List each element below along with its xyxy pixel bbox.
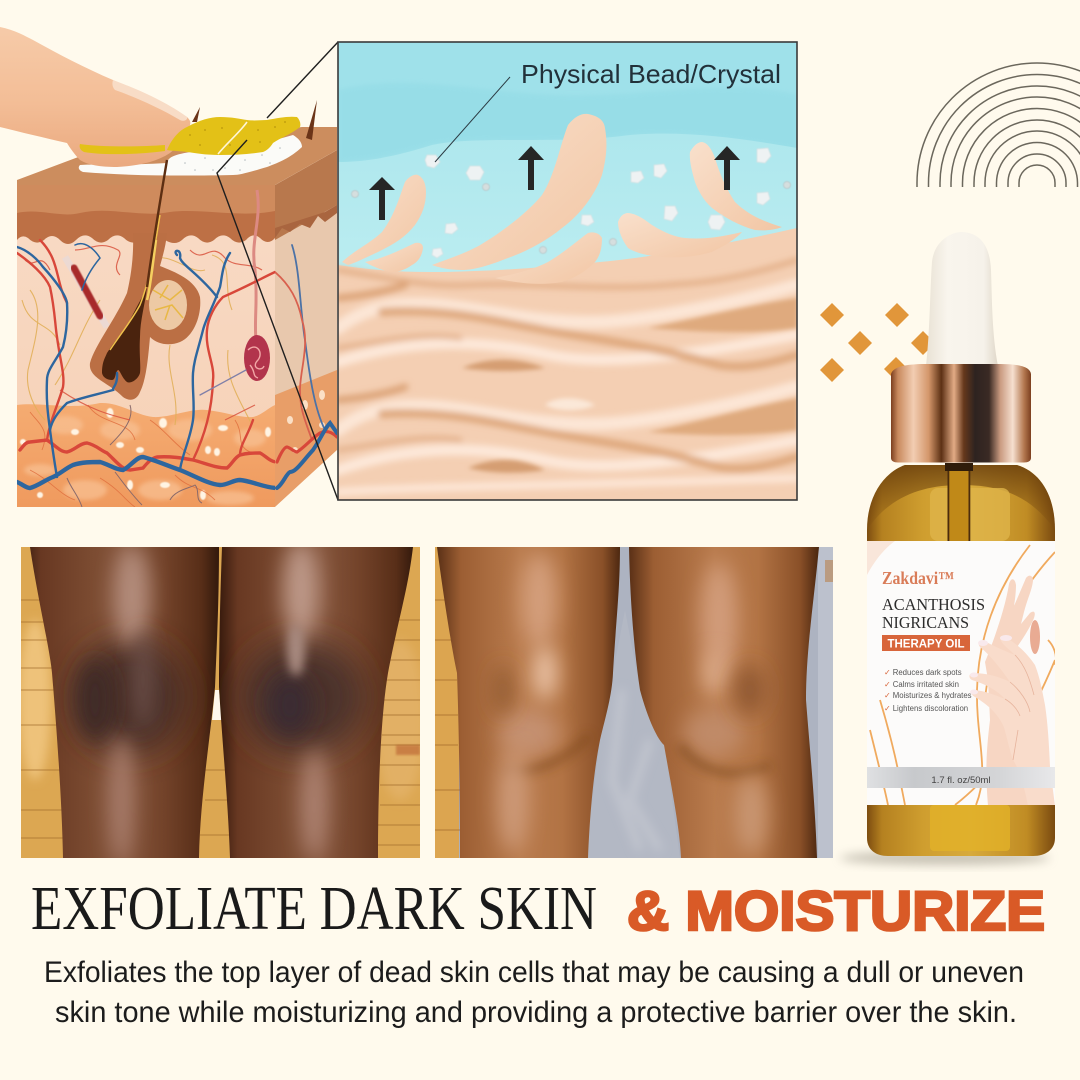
bottle shadow <box>840 851 1050 865</box>
cube right side face <box>275 150 337 510</box>
dropper bulb <box>926 232 998 366</box>
arrow: lift right <box>714 146 740 190</box>
brand name: Zakdavi™ <box>882 568 954 588</box>
fibres lifting from the surface <box>342 114 782 284</box>
right leg <box>218 540 416 860</box>
thin capillaries <box>22 255 252 425</box>
body text: Exfoliates the top layer of dead skin cells that may be causing a dull or uneven <box>44 956 1024 989</box>
label swooshes <box>870 545 1056 805</box>
volume band: 1.7 fl. oz/50ml <box>931 775 991 786</box>
zoom callout lines <box>217 42 338 500</box>
finger <box>0 27 190 167</box>
right leg <box>629 547 819 858</box>
product name <box>882 595 985 632</box>
product label <box>867 541 1056 806</box>
body text: skin tone while moisturizing and providing a protective barrier over the skin. <box>55 996 1017 1029</box>
left leg <box>21 545 221 865</box>
panel: magnified exfoliation <box>338 42 798 500</box>
exfoliated beads <box>352 148 790 258</box>
benefit list <box>884 668 972 713</box>
left leg <box>437 547 621 858</box>
photo: before, dark knees <box>19 540 425 865</box>
sweat gland <box>244 190 270 381</box>
hands illustration <box>969 576 1055 806</box>
benefit list: ✓ Calms irritated skin <box>884 680 959 689</box>
rose gold collar <box>891 364 1031 462</box>
product: serum bottle <box>840 232 1056 865</box>
applicator sponge <box>80 117 300 155</box>
benefit list: ✓ Moisturizes & hydrates <box>884 691 972 700</box>
therapy oil badge: THERAPY OIL <box>887 638 965 650</box>
foam layer <box>79 135 302 176</box>
dropper tube <box>945 463 973 541</box>
volume band <box>867 767 1055 788</box>
icon: orange diamonds <box>820 303 935 382</box>
subcutaneous fat <box>17 403 275 507</box>
benefit list: ✓ Lightens discoloration <box>884 704 968 713</box>
product name: ACANTHOSIS <box>882 595 985 614</box>
skin fibres <box>338 228 798 500</box>
photo: after, lightened knees <box>435 547 833 858</box>
arrow: lift left <box>369 177 395 220</box>
product name: NIGRICANS <box>882 613 969 632</box>
arrow: lift centre <box>518 146 544 190</box>
panel border <box>338 42 797 500</box>
hair shaft <box>147 160 167 287</box>
heading: accent part: & MOISTURIZE <box>627 879 1045 942</box>
icon: hairs <box>192 100 317 162</box>
fabric background <box>435 547 833 858</box>
illustration: skin cross-section cube <box>0 27 338 510</box>
amber glass body <box>867 465 1055 856</box>
heading: serif part: EXFOLIATE DARK SKIN <box>31 875 597 943</box>
cube front face <box>17 185 277 507</box>
leader line <box>435 77 510 162</box>
follicle and gland <box>90 233 200 400</box>
wood floor <box>19 547 425 858</box>
blood vessels <box>17 240 277 470</box>
back hand <box>985 576 1035 806</box>
heading <box>31 875 1045 943</box>
therapy oil badge <box>882 635 970 651</box>
muscle <box>65 257 107 327</box>
benefit list: ✓ Reduces dark spots <box>884 668 962 677</box>
label: physical bead: Physical Bead/Crystal <box>521 59 781 89</box>
body text <box>44 956 1024 1029</box>
icon: concentric arcs <box>917 63 1080 187</box>
front hand <box>969 636 1055 806</box>
fingernail <box>112 80 187 121</box>
cube top surface <box>17 127 337 185</box>
